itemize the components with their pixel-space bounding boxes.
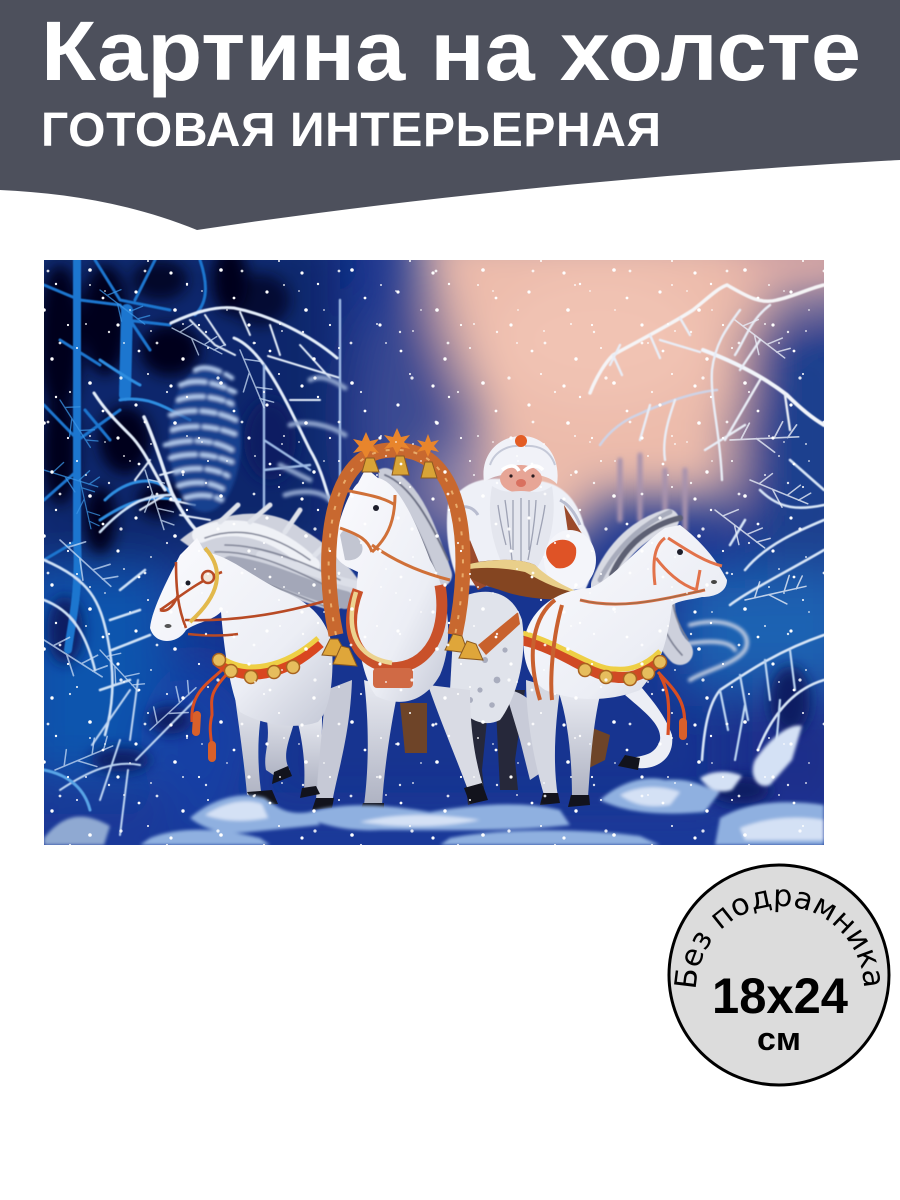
- painting background: [44, 260, 824, 845]
- head and body: [334, 468, 448, 702]
- frost twig clusters right: [714, 318, 812, 605]
- muff and mitten: [544, 530, 596, 590]
- Ded Moroz: [447, 435, 596, 590]
- legs: [526, 680, 560, 797]
- spotted barrel: [450, 592, 523, 723]
- legs: [428, 685, 483, 790]
- fur coat: [447, 479, 593, 590]
- sleigh underside: [400, 703, 610, 770]
- hat: [483, 436, 558, 484]
- subtitle: ГОТОВАЯ ИНТЕРЬЕРНАЯ: [41, 104, 661, 157]
- sleigh front: [470, 560, 575, 600]
- frost twig clusters left: [44, 289, 274, 771]
- beard: [490, 486, 554, 568]
- snow on the ground: [140, 725, 824, 845]
- horse collar: [352, 585, 442, 668]
- bridle right: [580, 538, 722, 604]
- duga arch with bells: [329, 428, 463, 635]
- frost trees right: [590, 285, 824, 760]
- frost trees left: [44, 260, 340, 835]
- badge size: 18x24: [712, 968, 848, 1024]
- middle horse: [334, 468, 523, 815]
- bridle: [160, 562, 335, 636]
- header banner: [0, 0, 900, 230]
- painting: troika with Ded Moroz in a winter forest: [44, 260, 824, 845]
- mane: [385, 475, 448, 575]
- right horse: [523, 512, 727, 807]
- mane: [180, 514, 365, 612]
- legs: [235, 699, 261, 796]
- title: Картина на холсте: [41, 4, 861, 98]
- curved badge caption: Без подрамника: [674, 889, 880, 987]
- left horse: [150, 505, 365, 810]
- spruce with snow: [165, 368, 345, 512]
- collar belt with bells: [216, 643, 320, 674]
- collar belt with bells right: [523, 640, 660, 678]
- dark forest gaps: [38, 246, 290, 554]
- rear legs between the horses: [466, 690, 525, 805]
- size badge: [668, 864, 890, 1086]
- harness bells: [322, 612, 520, 666]
- tassels right: [658, 672, 685, 735]
- mane: [600, 512, 688, 655]
- head and body: [524, 525, 727, 699]
- falling snow: [44, 260, 824, 845]
- face: [500, 465, 542, 493]
- tassels: [192, 670, 226, 750]
- badge unit: см: [757, 1021, 801, 1057]
- hooves: [247, 766, 334, 810]
- head and body: [150, 538, 332, 726]
